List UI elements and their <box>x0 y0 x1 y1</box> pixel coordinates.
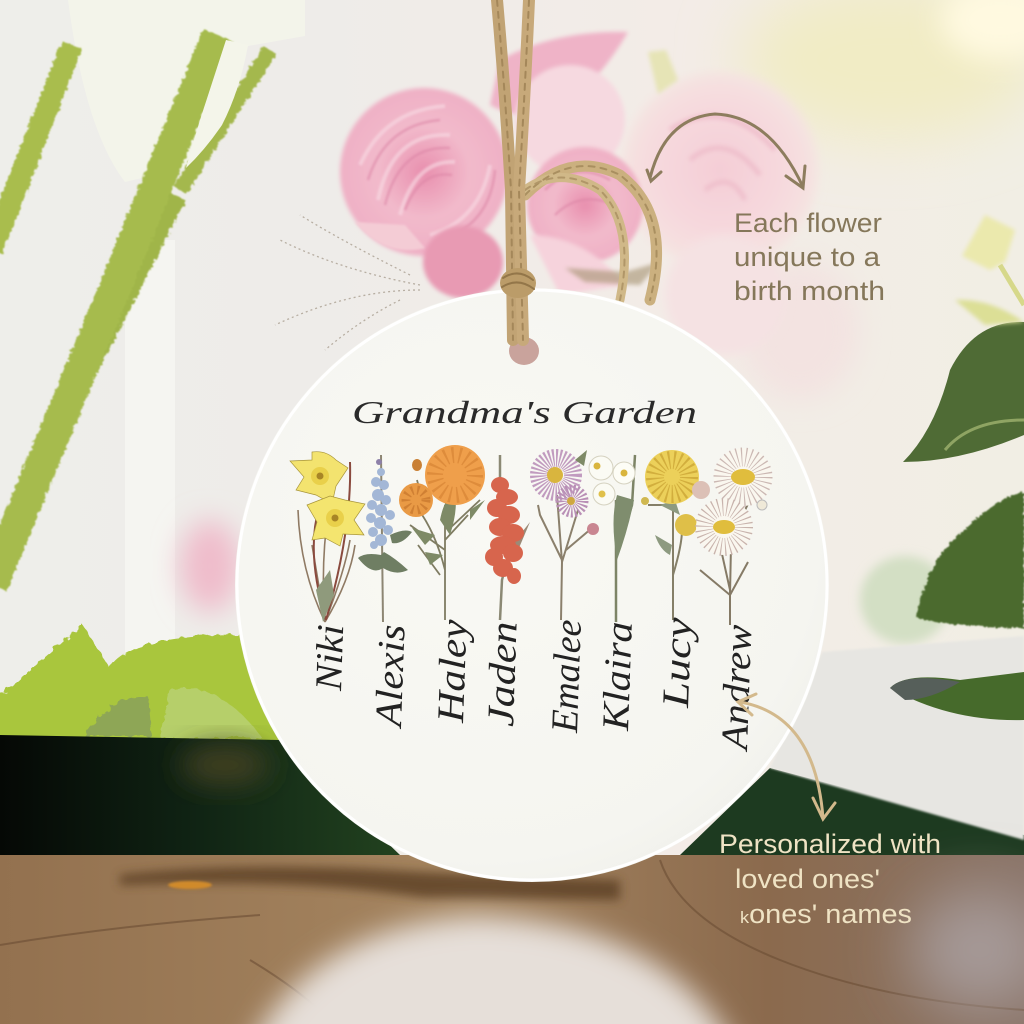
flower: Lucy chrysanthemum <box>641 450 710 620</box>
callout: personalized: loved ones' <box>735 864 880 894</box>
callout: personalized: Personalized with <box>719 829 941 859</box>
flower: Andrew daisies <box>696 448 772 625</box>
ornament disc <box>235 288 829 882</box>
flower: Haley marigold <box>399 445 485 620</box>
callout: each flower: Each flower <box>734 208 882 238</box>
name: Klaira: Klaira <box>595 621 641 732</box>
green moss, bottom left <box>0 624 280 742</box>
callout: each flower: unique to a <box>734 242 881 272</box>
wood table <box>0 855 1024 1024</box>
small petal over stem, top <box>186 40 248 168</box>
callout: personalized <box>721 834 940 924</box>
rope loop behind ornament <box>525 166 657 300</box>
name: Jaden: Jaden <box>480 621 526 727</box>
right leaves <box>890 215 1024 720</box>
name: Andrew: Andrew <box>714 623 760 754</box>
name: Haley: Haley <box>430 619 476 724</box>
ornament title: Grandma's Garden <box>352 394 697 430</box>
white petal, top left <box>68 0 305 182</box>
flower: Alexis larkspur <box>358 455 412 622</box>
callout: each flower <box>736 212 884 300</box>
green stems, left <box>0 35 270 585</box>
name: Emalee: Emalee <box>544 619 590 734</box>
flower: Emalee asters <box>538 450 599 620</box>
white box, right <box>770 636 1024 840</box>
name: Niki: Niki <box>308 624 352 692</box>
dark green band <box>0 735 1024 855</box>
callout: each flower: birth month <box>734 276 885 306</box>
twine <box>497 0 536 340</box>
callout: personalized: kones' names <box>740 899 912 929</box>
flower: Niki daffodils <box>290 452 365 622</box>
background: photo backdrop <box>172 0 1024 650</box>
flower: Jaden gladiolus <box>485 455 530 620</box>
knot <box>500 268 536 298</box>
name: Alexis: Alexis <box>368 624 414 731</box>
arrow: to names <box>738 694 835 819</box>
name: Lucy: Lucy <box>655 617 700 710</box>
hanging hole <box>509 337 539 365</box>
arrow: to flowers <box>647 114 805 188</box>
peony bouquet <box>275 32 818 355</box>
flower: Klaira narcissus <box>589 455 635 622</box>
